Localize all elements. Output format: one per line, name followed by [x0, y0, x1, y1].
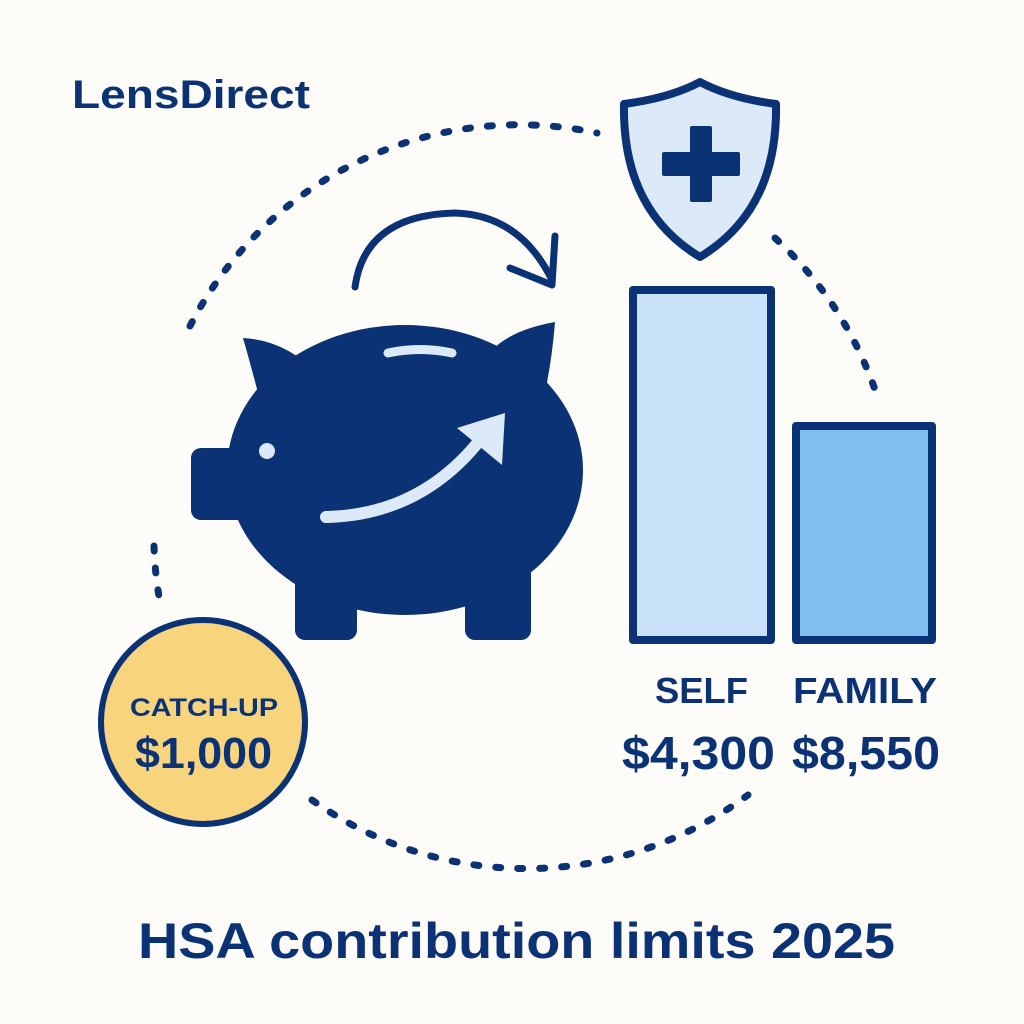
icon: shield with cross [624, 82, 776, 257]
slot [388, 350, 452, 353]
logo: LensDirect [72, 73, 310, 117]
growth arrow [326, 440, 480, 517]
bar labels [622, 670, 940, 779]
icon: piggy bank [191, 322, 583, 640]
title: HSA contribution limits 2025 [138, 913, 895, 969]
catch-up coin: CATCH-UP [130, 694, 278, 722]
dotted circle path [154, 125, 879, 869]
catch-up coin: $1,000 [135, 729, 272, 778]
bar labels: $8,550 [792, 727, 940, 779]
eye [259, 443, 275, 459]
bar labels: FAMILY [793, 670, 937, 711]
icon: curved arrow [355, 213, 555, 287]
bar labels: SELF [655, 670, 748, 711]
catch-up coin [101, 620, 305, 824]
bar labels: $4,300 [622, 727, 775, 779]
bar chart [633, 290, 932, 640]
